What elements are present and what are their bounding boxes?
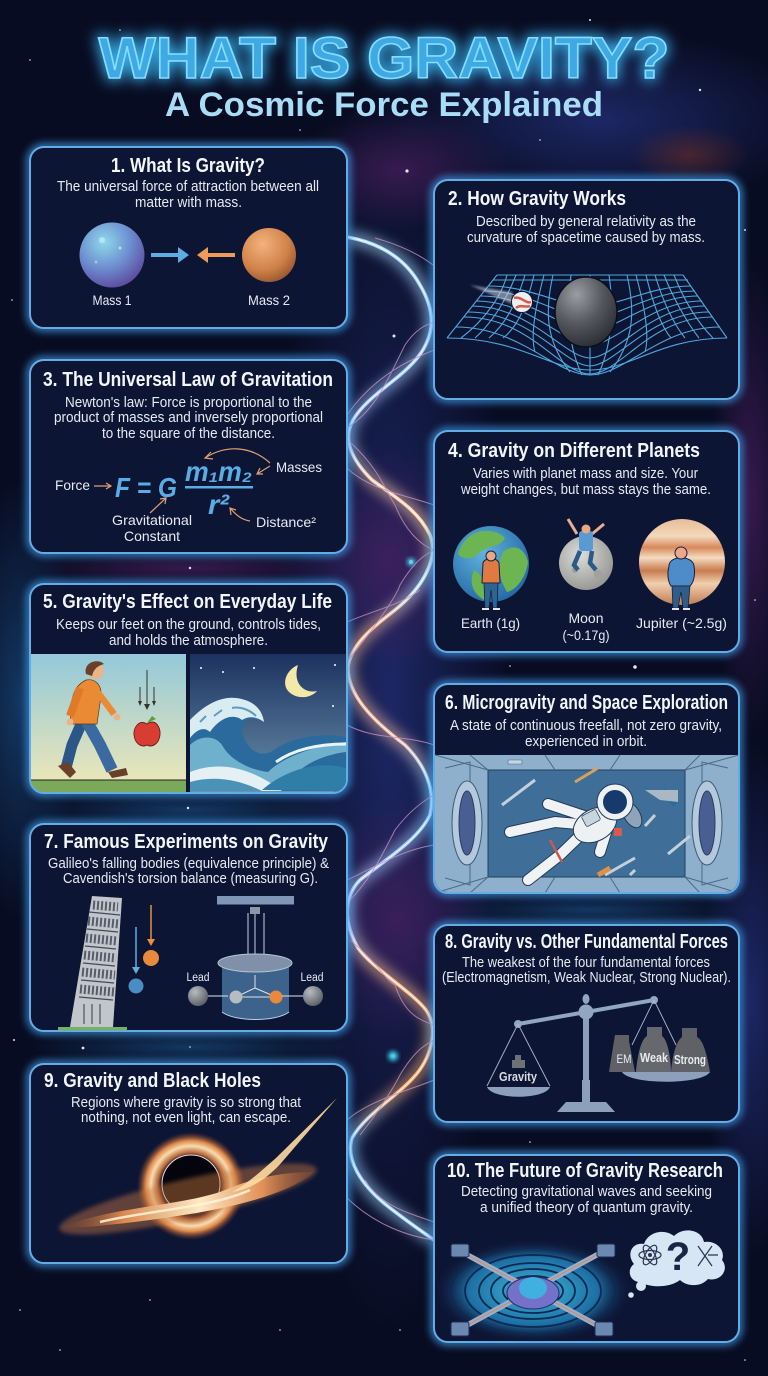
icon: thought cloud with question: ? (666, 1235, 690, 1279)
label: weak weight: Weak (640, 1051, 668, 1065)
icon: balance scale (487, 994, 710, 1112)
description 8: (Electromagnetism, Weak Nuclear, Strong Nuclear). (442, 970, 731, 986)
description 1: matter with mass. (135, 195, 242, 211)
icon: mass 2 planet (242, 228, 296, 282)
label: mass 2: Mass 2 (248, 292, 290, 308)
icon: cavendish torsion balance (188, 896, 323, 1020)
illustration: black hole with accretion disk (55, 1098, 337, 1248)
description 8 (442, 955, 731, 986)
formula: F = G (115, 472, 177, 503)
formula (115, 456, 253, 520)
label: lead left: Lead (186, 972, 210, 984)
panel 10: future research (433, 1155, 739, 1343)
label: mass 1: Mass 1 (92, 292, 132, 308)
description 10 (461, 1184, 712, 1216)
description 5: and holds the atmosphere. (109, 633, 268, 649)
description 1: The universal force of attraction between all (57, 179, 319, 195)
description 10: Detecting gravitational waves and seeking (461, 1184, 712, 1200)
heading 2: 2. How Gravity Works (448, 188, 626, 210)
label: earth: Earth (1g) (461, 615, 520, 631)
description 9 (71, 1095, 301, 1126)
icon: thought cloud with question (628, 1230, 725, 1298)
description 4: Varies with planet mass and size. Your (473, 466, 698, 482)
formula: m₁m₂ (185, 456, 252, 487)
panel 1: what is gravity (30, 147, 347, 328)
panel 6: microgravity (434, 684, 739, 893)
description 2: curvature of spacetime caused by mass. (467, 230, 705, 246)
panel 3: law of gravitation (30, 360, 347, 553)
title: WHAT IS GRAVITY? (98, 26, 670, 91)
heading 7: 7. Famous Experiments on Gravity (44, 831, 329, 853)
label: strong weight: Strong (674, 1053, 706, 1067)
description 2 (467, 214, 705, 246)
heading 1: 1. What Is Gravity? (111, 155, 265, 177)
description 2: Described by general relativity as the (476, 214, 696, 230)
subtitle: A Cosmic Force Explained (165, 86, 603, 124)
illustration: space station interior (435, 755, 739, 893)
description 3: Newton's law: Force is proportional to the (65, 395, 312, 411)
icon: moon with jumping person (559, 519, 613, 590)
label: moon: Moon (568, 610, 604, 626)
label: EM weight: EM (616, 1054, 632, 1066)
panel 2: how gravity works (434, 180, 739, 399)
description 7: Cavendish's torsion balance (measuring G). (63, 871, 318, 887)
label: force: Force (55, 477, 90, 493)
description 9: Regions where gravity is so strong that (71, 1095, 301, 1111)
description 7: Galileo's falling bodies (equivalence principle) & (48, 856, 329, 872)
description 3 (54, 395, 323, 442)
description 5 (56, 617, 321, 649)
label: gravitational constant: Constant (124, 528, 180, 544)
label: lead right: Lead (300, 972, 324, 984)
title glow: WHAT IS GRAVITY? (98, 26, 670, 91)
description 4 (460, 466, 711, 498)
description 10: a unified theory of quantum gravity. (480, 1200, 693, 1216)
chart: spacetime grid well (447, 275, 727, 375)
illustration: wave detector (433, 1239, 633, 1343)
label: moon (562, 610, 610, 643)
heading 4: 4. Gravity on Different Planets (448, 440, 700, 462)
heading 3: 3. The Universal Law of Gravitation (43, 369, 333, 391)
formula: r² (208, 489, 230, 520)
illustration: moon and wave (190, 654, 347, 792)
icon: massive sphere (555, 277, 617, 347)
label: masses: Masses (276, 459, 322, 475)
description 6: experienced in orbit. (525, 734, 647, 750)
panel 4: different planets (434, 431, 739, 652)
arrows: formula annotations (94, 449, 270, 521)
panel 5: everyday life (30, 584, 347, 793)
icon: mass 1 planet (80, 222, 144, 288)
description 3: to the square of the distance. (102, 426, 275, 442)
description 6: A state of continuous freefall, not zero gravity, (450, 718, 722, 734)
label: moon: (~0.17g) (562, 627, 610, 643)
heading 9: 9. Gravity and Black Holes (44, 1070, 261, 1092)
description 9: nothing, not even light, can escape. (81, 1110, 291, 1126)
arrow: orange toward mass 1 (197, 247, 235, 263)
description 8: The weakest of the four fundamental forces (462, 955, 710, 971)
label: gravity weight: Gravity (499, 1070, 537, 1084)
description 7 (48, 856, 329, 887)
panel 7: famous experiments (30, 824, 347, 1031)
label: distance squared: Distance² (256, 514, 316, 530)
description 3: product of masses and inversely proportional (54, 410, 323, 426)
panel 8: other forces (434, 925, 739, 1122)
heading 5: 5. Gravity's Effect on Everyday Life (43, 591, 332, 613)
icon: motion trail (470, 285, 514, 305)
icon: earth with person (453, 526, 529, 609)
icon: falling balls with arrows (128, 905, 159, 994)
description 5: Keeps our feet on the ground, controls tides, (56, 617, 321, 633)
panel 9: black holes (30, 1064, 347, 1263)
icon: leaning tower of pisa (58, 896, 127, 1030)
illustration: walking person and apple (31, 654, 186, 792)
icon: small planet (512, 292, 532, 312)
label: gravitational constant (112, 512, 192, 544)
energy strands between panels (347, 237, 434, 1240)
label: jupiter: Jupiter (~2.5g) (636, 615, 727, 631)
description 1 (57, 179, 319, 211)
description 6 (450, 718, 722, 750)
icon: jupiter with person (639, 519, 725, 609)
description 4: weight changes, but mass stays the same. (460, 482, 711, 498)
arrow: blue toward mass 2 (151, 247, 189, 263)
label: gravitational constant: Gravitational (112, 512, 192, 528)
